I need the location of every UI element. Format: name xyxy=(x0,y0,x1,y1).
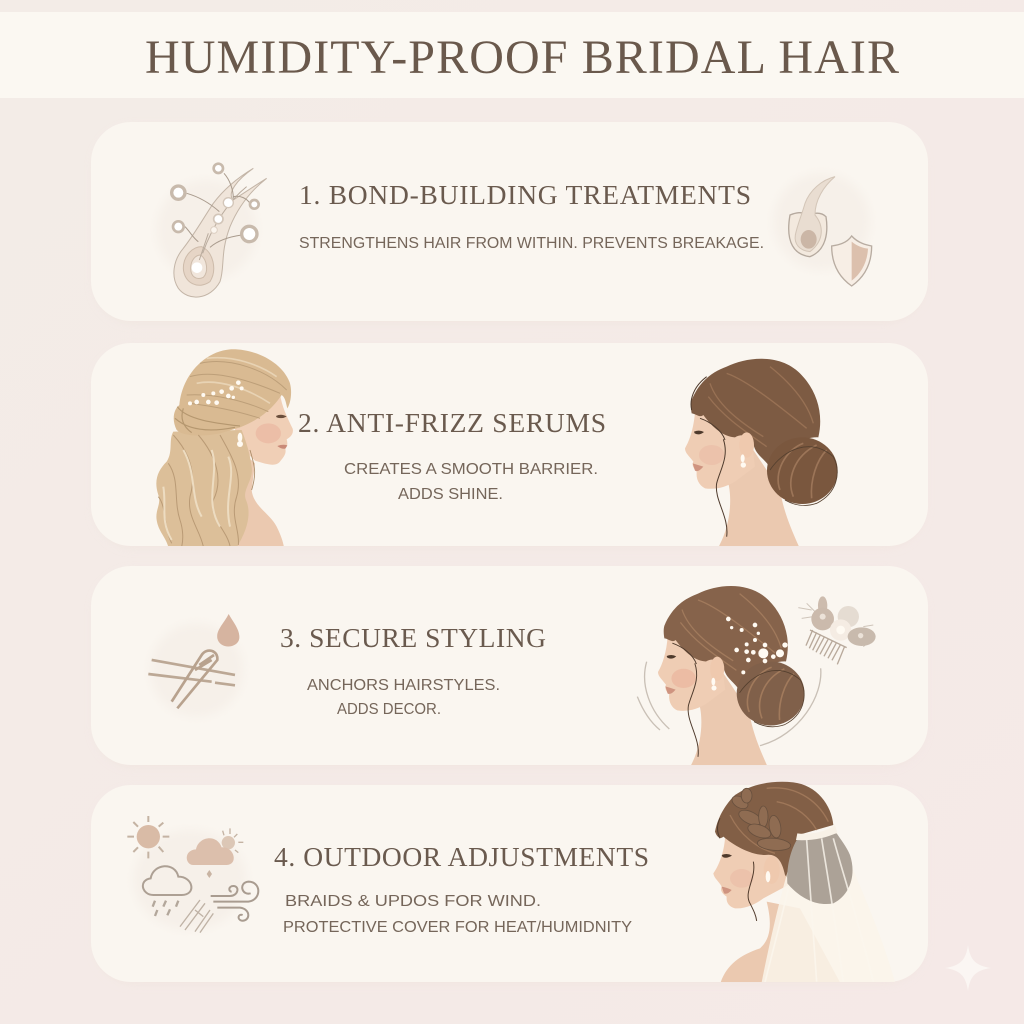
heading: 2. ANTI-FRIZZ SERUMS xyxy=(298,407,606,438)
body text: STRENGTHENS HAIR FROM WITHIN. PREVENTS BREAKAGE. xyxy=(299,235,764,252)
heading: 4. OUTDOOR ADJUSTMENTS xyxy=(274,841,649,872)
body text xyxy=(307,677,500,718)
illustration: brunette low bun xyxy=(685,359,838,547)
body text xyxy=(344,461,598,503)
icon: hair follicle with bond nodes xyxy=(157,164,267,297)
body text xyxy=(283,893,632,936)
sparkle decoration xyxy=(945,945,991,991)
body text: ADDS SHINE. xyxy=(398,486,503,503)
title: HUMIDITY-PROOF BRIDAL HAIR xyxy=(145,31,899,84)
heading: 3. SECURE STYLING xyxy=(280,622,546,653)
illustration: blonde half-up waves xyxy=(156,349,293,547)
body text: ADDS DECOR. xyxy=(337,701,441,718)
illustration: pearl hair pins, comb and motion arcs xyxy=(637,596,876,746)
body text: BRAIDS & UPDOS FOR WIND. xyxy=(285,893,541,910)
panel: outdoor adjustments xyxy=(91,782,928,983)
title banner xyxy=(0,12,1024,98)
body text: PROTECTIVE COVER FOR HEAT/HUMIDNITY xyxy=(283,919,632,936)
heading: 1. BOND-BUILDING TREATMENTS xyxy=(299,179,751,210)
panel: bond-building treatments xyxy=(91,122,928,322)
icon: weather set xyxy=(127,816,258,933)
panel: secure styling xyxy=(91,566,928,767)
panel: anti-frizz serums xyxy=(91,343,928,547)
icon: follicle and shield xyxy=(773,173,872,286)
illustration: low bun with hair pins xyxy=(658,586,805,767)
illustration: braided updo with veil xyxy=(713,782,895,982)
icon: hair pins and droplet xyxy=(148,614,243,717)
body text: CREATES A SMOOTH BARRIER. xyxy=(344,461,598,478)
body text: ANCHORS HAIRSTYLES. xyxy=(307,677,500,694)
